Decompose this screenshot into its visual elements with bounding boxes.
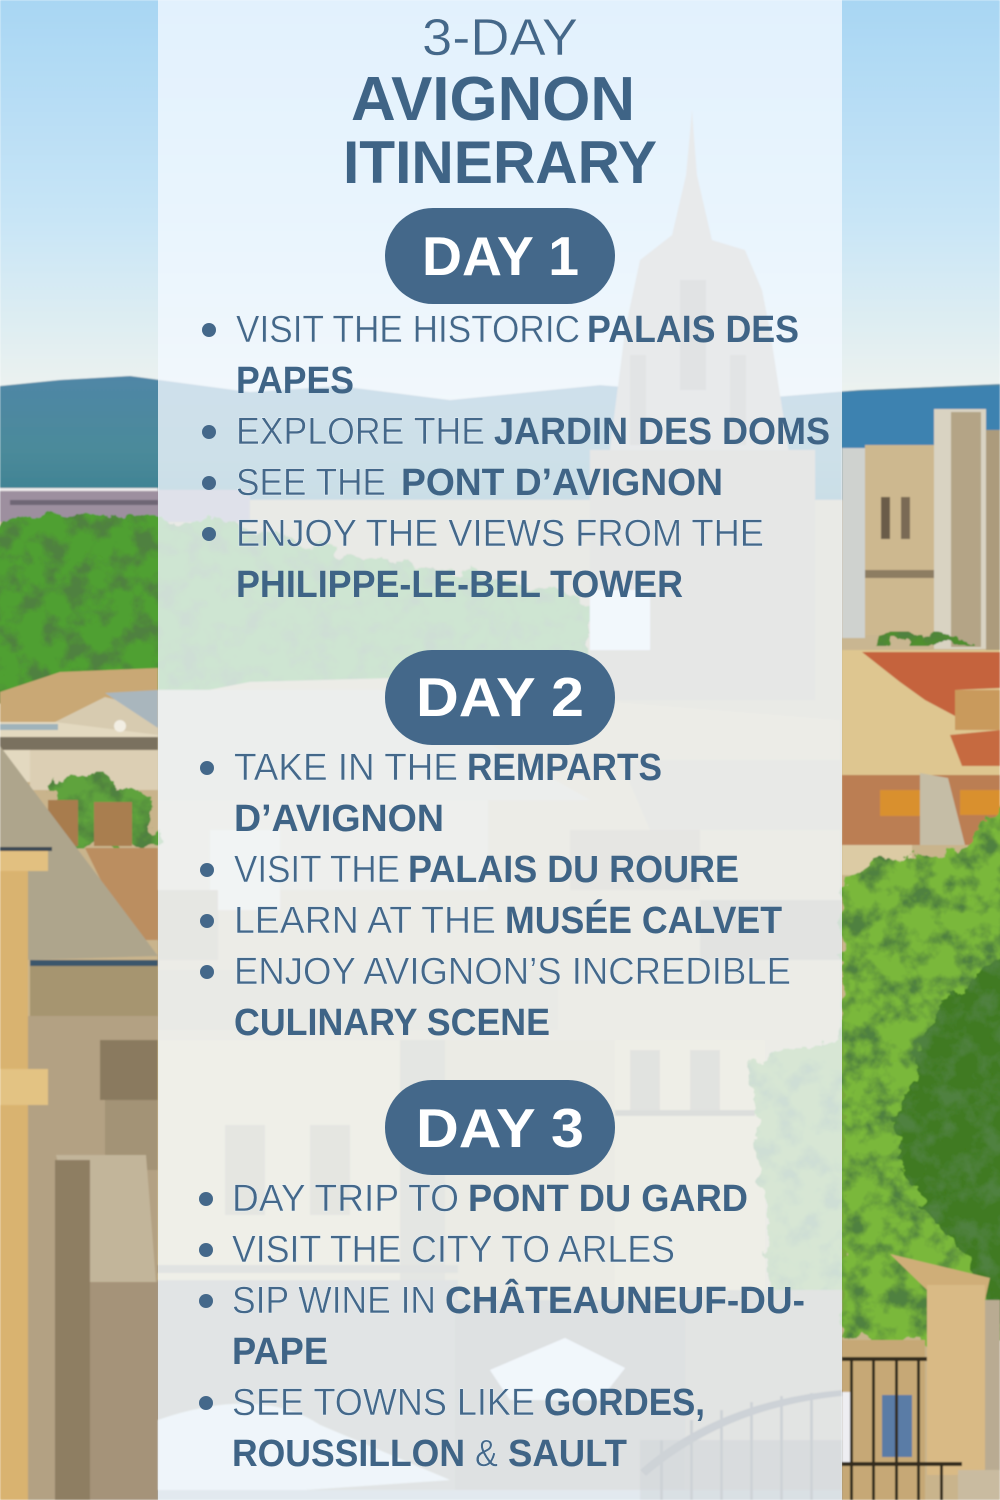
far building [0,490,250,522]
day 3 badge [385,1080,615,1175]
day 3 list: ROUSSILLON [232,1433,465,1475]
day 2 list: REMPARTS [467,747,662,789]
day 2 list: D’AVIGNON [234,798,444,840]
mid town buildings [158,676,840,1500]
lower facades [158,1040,403,1280]
title line: 3-DAY: 3-DAY [422,9,578,67]
day 2 list: ENJOY AVIGNON’S INCREDIBLE [234,951,791,993]
day 1 list [202,309,830,606]
day 2 list [200,747,791,1044]
title line: ITINERARY: ITINERARY [343,129,657,196]
central stone tower [590,110,815,700]
day 2 list: LEARN AT THE [234,900,496,942]
day 3 list: GORDES, [544,1382,705,1424]
day 2 list: PALAIS DU ROURE [408,849,739,891]
day 3 list: SIP WINE IN [232,1280,436,1322]
day 2 badge [385,650,615,745]
fence in panel [640,1390,842,1500]
day 3 list [199,1178,805,1475]
left strip scene [0,668,158,722]
day 3 list: CHÂTEAUNEUF-DU- [445,1278,805,1322]
day 3 list: PAPE [232,1331,328,1373]
day 3 list: VISIT THE CITY TO ARLES [232,1229,675,1271]
day 2 badge: DAY 2 [416,666,584,728]
distant hills [0,376,1000,500]
day 3 list: PONT DU GARD [468,1178,748,1220]
tree line [0,514,590,700]
day 3 list: SAULT [508,1433,627,1475]
day 1 list: PHILIPPE-LE-BEL TOWER [236,564,683,606]
right strip scene [842,448,1000,653]
day 1 list: PAPES [236,360,354,402]
title line: AVIGNON: AVIGNON [351,65,635,134]
day 1 list: EXPLORE THE [236,411,485,453]
day 2 list: MUSÉE CALVET [505,898,782,942]
title [343,9,657,196]
day 1 list: SEE THE [236,462,386,504]
day 1 badge [385,208,615,304]
day 2 list: CULINARY SCENE [234,1002,550,1044]
day 3 list: DAY TRIP TO [232,1178,459,1220]
day 3 list: SEE TOWNS LIKE [232,1382,535,1424]
day 2 list: TAKE IN THE [234,747,458,789]
day 1 list: PONT D’AVIGNON [401,462,723,504]
translucent centre panel [158,0,842,1500]
day 1 list: ENJOY THE VIEWS FROM THE [236,513,764,555]
right trees [842,800,1000,1340]
day 1 list: PALAIS DES [587,309,799,351]
day 1 list: JARDIN DES DOMS [494,411,830,453]
day 3 badge: DAY 3 [416,1097,584,1159]
day 2 list: VISIT THE [234,849,400,891]
day 1 list: VISIT THE HISTORIC [236,309,580,351]
day 3 list: & [475,1433,498,1475]
day 1 badge: DAY 1 [422,225,579,287]
